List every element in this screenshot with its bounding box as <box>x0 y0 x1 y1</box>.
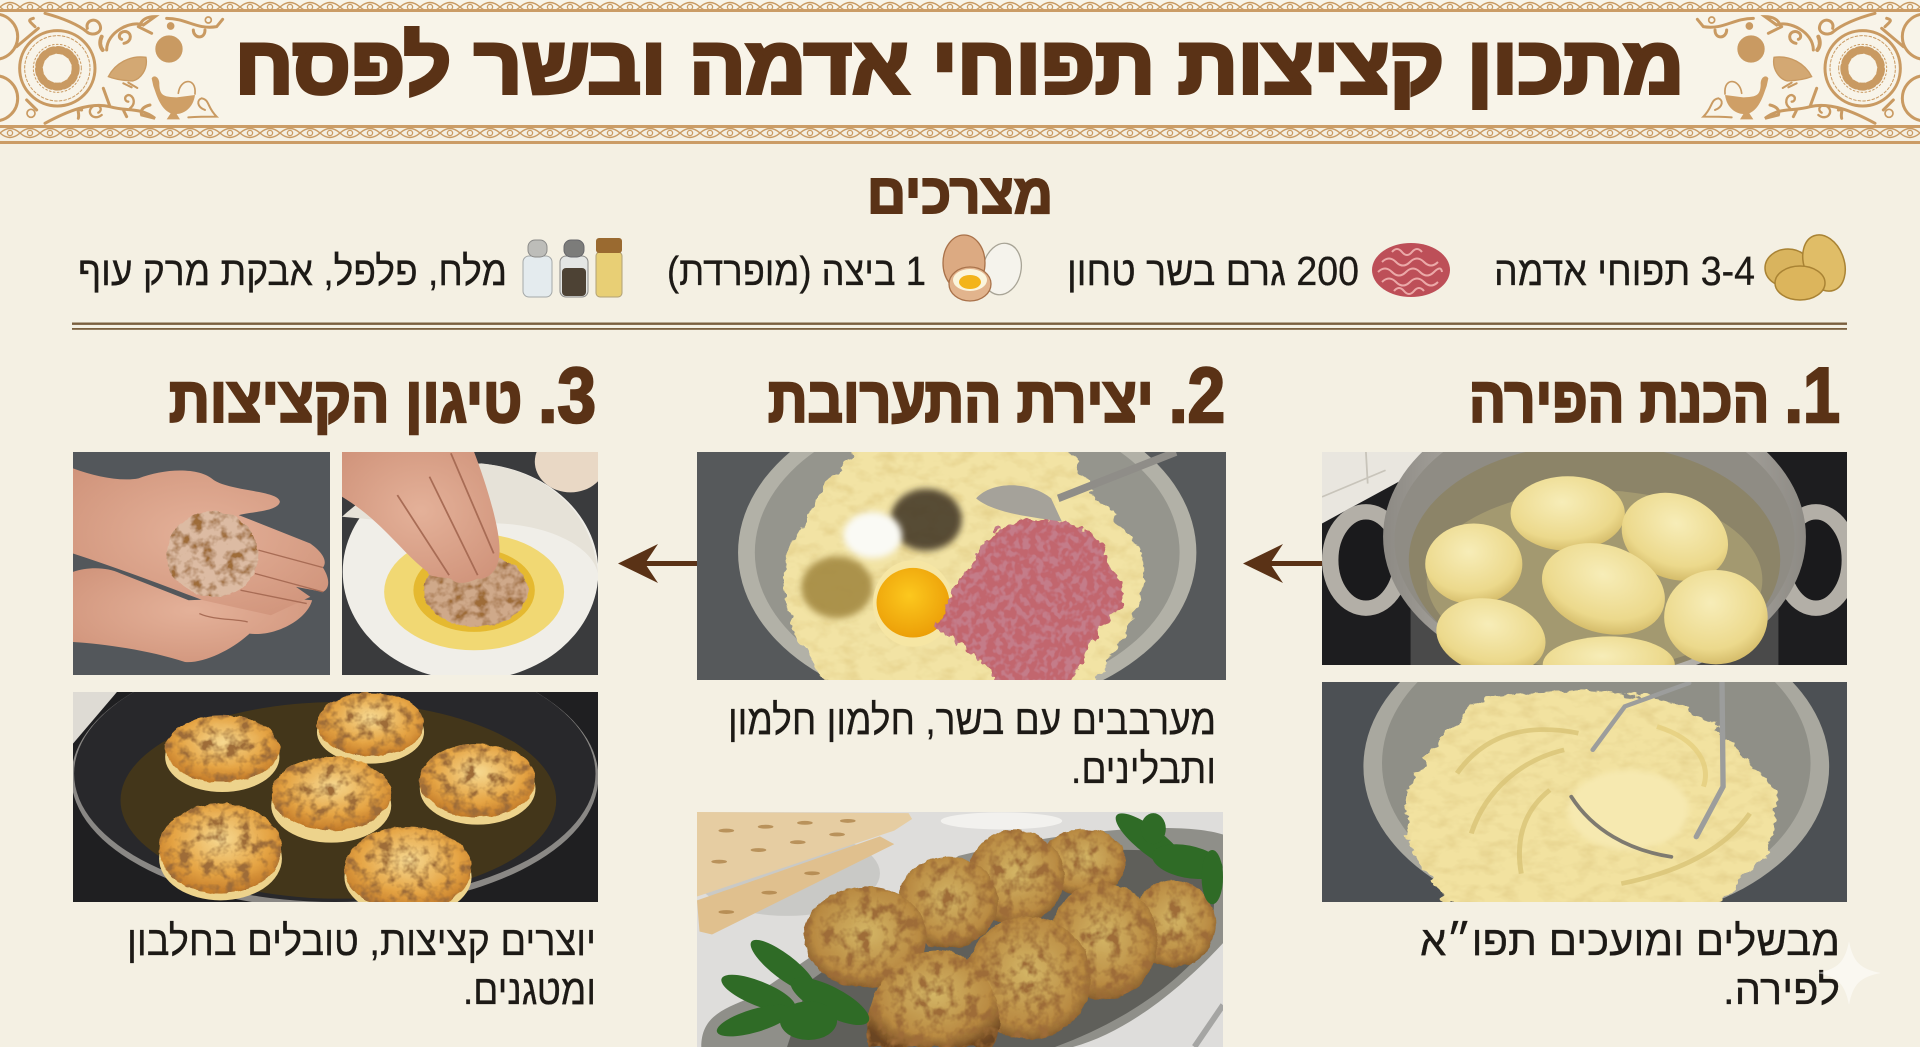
heading: step 1: 1. הכנת הפירה <box>1469 351 1840 439</box>
ingredient: egg text: 1 ביצה (מופרדת) <box>667 248 926 294</box>
heading: step 2: 2. יצירת התערובת <box>768 351 1225 439</box>
photo: shaping a patty in hands <box>73 452 330 675</box>
photo: mixture in glass bowl <box>697 452 1226 680</box>
arrow: step 1 to step 2 <box>1243 544 1322 583</box>
step 2 description: ותבלינים. <box>1071 745 1216 792</box>
ingredient: seasoning text: מלח, פלפל, אבקת מרק עוף <box>78 248 507 294</box>
step 1 description: לפירה. <box>1723 966 1840 1013</box>
photo: dipping a patty in egg white <box>342 452 598 675</box>
step 1 description <box>1420 917 1840 1013</box>
photo: potatoes boiling in pot <box>1322 452 1847 665</box>
ornament: left floral medallion and rooster <box>0 13 223 123</box>
icon: salt, pepper and soup powder <box>523 238 622 297</box>
ingredient: meat text: 200 גרם בשר טחון <box>1067 248 1359 294</box>
photo: finished patties on platter with matzah <box>697 812 1223 1047</box>
icon: sparkle watermark <box>1817 941 1881 1005</box>
ornament: right floral medallion and rooster <box>1697 13 1920 123</box>
icon: eggs <box>943 235 1026 301</box>
arrow: step 2 to step 3 <box>618 544 697 583</box>
title: מתכון קציצות תפוחי אדמה ובשר לפסח <box>235 21 1684 110</box>
heading: step 3: 3. טיגון הקציצות <box>169 351 596 439</box>
icon: ground meat <box>1372 243 1450 297</box>
step 1 description: מבשלים ומועכים תפו״א <box>1420 917 1840 964</box>
icon: potatoes <box>1765 229 1853 300</box>
photo: frying patties in pan <box>73 692 598 902</box>
step 3 description: ומטגנים. <box>463 966 596 1013</box>
divider <box>72 322 1847 330</box>
heading: ingredients: מצרכים <box>867 162 1053 225</box>
step 2 description <box>728 696 1216 792</box>
header banner <box>0 0 1920 144</box>
step 3 description: יוצרים קציצות, טובלים בחלבון <box>127 917 596 964</box>
step 2 description: מערבבים עם בשר, חלמון חלמון <box>728 696 1216 743</box>
photo: mashing potatoes in glass bowl <box>1322 682 1847 902</box>
step 3 description <box>127 917 596 1013</box>
ingredient: potatoes text: 3-4 תפוחי אדמה <box>1494 248 1755 294</box>
